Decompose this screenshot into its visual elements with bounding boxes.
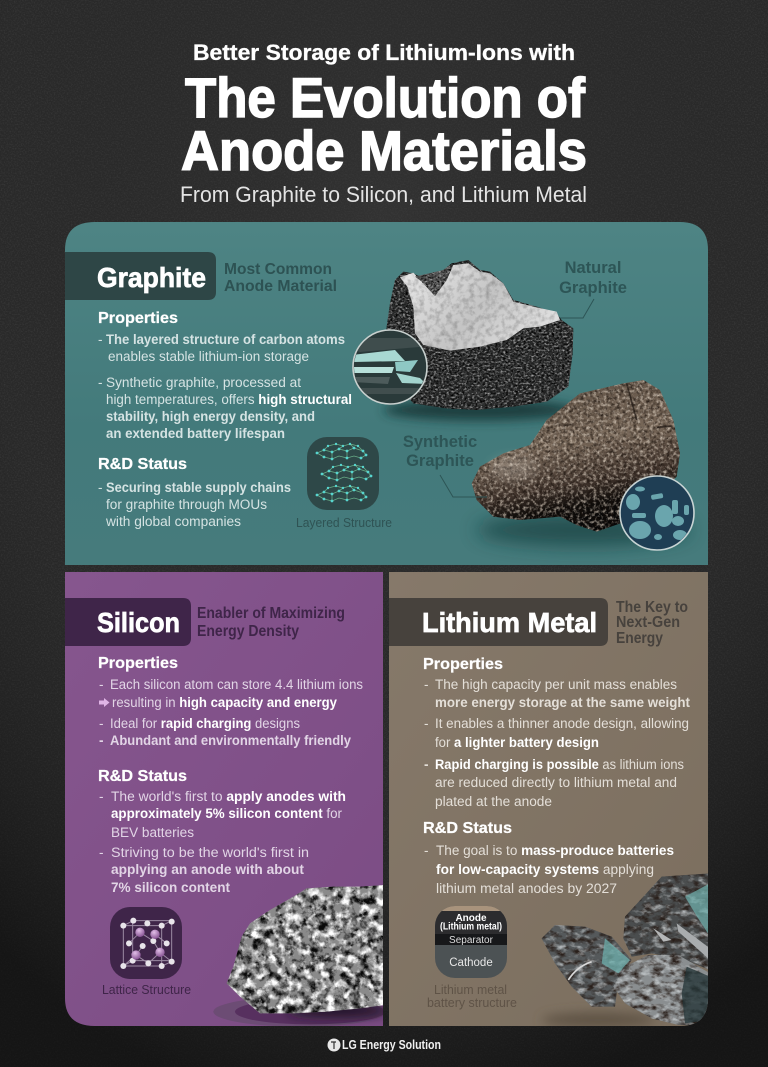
lithium metal properties text: for a lighter battery design (435, 735, 599, 750)
lithium metal properties text: - (424, 716, 428, 731)
lithium metal panel background (389, 572, 708, 1026)
natural graphite rock (383, 260, 577, 421)
lithium metal battery structure caption (427, 982, 517, 1010)
silicon R&D status text: R&D Status (98, 768, 187, 785)
graphite properties text: - (98, 332, 102, 347)
icon: lithium metal battery structure: (Lithium metal) (440, 922, 502, 932)
title block (180, 40, 587, 207)
synthetic graphite label: Synthetic (403, 433, 477, 451)
lithium metal R&D status text (423, 820, 674, 896)
icon: lattice structure (110, 907, 182, 979)
panel: graphite (65, 222, 708, 565)
graphite R&D status text: - (98, 480, 102, 495)
synthetic graphite label: Graphite (406, 452, 474, 470)
lithium metal battery structure caption: Lithium metal (434, 982, 507, 997)
silicon subtitle (197, 605, 345, 640)
silicon R&D status text: - (99, 789, 104, 804)
graphite properties text (98, 310, 352, 441)
icon: lithium metal battery structure: Anode (455, 913, 487, 924)
silicon properties text: Each silicon atom can store 4.4 lithium ions (110, 677, 363, 692)
silicon properties text: - (99, 716, 104, 731)
synthetic graphite label (403, 433, 477, 470)
lattice structure caption: Lattice Structure (102, 982, 191, 997)
lithium metal properties text: Properties (423, 656, 503, 673)
silicon properties text: Ideal for rapid charging designs (110, 716, 300, 731)
icon: lithium metal battery structure: Separator (449, 935, 494, 946)
graphite properties text: Synthetic graphite, processed at (106, 375, 301, 390)
lithium metal R&D status text: lithium metal anodes by 2027 (436, 881, 617, 896)
graphite subtitle: Anode Material (224, 278, 337, 295)
lithium metal properties text: The high capacity per unit mass enables (435, 677, 677, 692)
natural graphite label: Natural (565, 259, 621, 277)
lithium metal R&D status text: - (424, 843, 428, 858)
synthetic graphite leader line (440, 475, 487, 497)
graphite heading label: Graphite (97, 262, 206, 293)
graphite R&D status text: for graphite through MOUs (106, 497, 267, 512)
silicon R&D status text: The world's first to apply anodes with (111, 789, 346, 804)
lithium metal properties text: It enables a thinner anode design, allowing (435, 716, 689, 731)
icon: arrow (99, 698, 110, 707)
lithium metal properties text: - (424, 757, 428, 772)
graphite R&D status text: with global companies (105, 514, 241, 529)
silicon properties text: Abundant and environmentally friendly (110, 733, 351, 748)
lithium metal properties text: more energy storage at the same weight (435, 695, 690, 710)
title block: From Graphite to Silicon, and Lithium Metal (180, 182, 587, 207)
natural graphite label: Graphite (559, 279, 627, 297)
graphite subtitle: Most Common (224, 261, 332, 278)
graphite R&D status text (98, 456, 291, 529)
synthetic graphite magnifier circle (620, 476, 694, 550)
silicon R&D status text: - (99, 845, 104, 860)
lithium metal R&D status text: for low-capacity systems applying (436, 862, 654, 877)
lithium metal battery structure caption: battery structure (427, 995, 517, 1010)
silicon heading label: Silicon (97, 607, 180, 638)
lithium metal subtitle (616, 599, 688, 647)
silicon panel background (65, 572, 383, 1026)
silicon R&D status text: Striving to be the world's first in (111, 845, 309, 860)
silicon R&D status text: applying an anode with about (111, 862, 304, 877)
silicon subtitle: Energy Density (197, 623, 299, 640)
lithium metal properties text: Rapid charging is possible as lithium ions (435, 757, 684, 772)
graphite R&D status text: R&D Status (98, 456, 187, 473)
lithium metal properties text: are reduced directly to lithium metal and (435, 775, 677, 790)
graphite properties text: - (98, 375, 102, 390)
silicon properties text: Properties (98, 655, 178, 672)
lithium metal subtitle: The Key to (616, 599, 688, 616)
silicon heading label (65, 598, 191, 646)
lithium metal properties text (423, 656, 690, 809)
silicon metal rock (213, 885, 387, 1027)
graphite properties text: The layered structure of carbon atoms (106, 332, 345, 347)
silicon properties text: - (99, 733, 104, 748)
silicon properties text (98, 655, 363, 748)
graphite properties text: enables stable lithium-ion storage (108, 349, 309, 364)
graphite properties text: Properties (98, 310, 178, 327)
graphite properties text: stability, high energy density, and (106, 409, 315, 424)
lithium metal properties text: plated at the anode (435, 794, 552, 809)
graphite panel background (65, 222, 708, 565)
graphite subtitle (224, 261, 337, 295)
lithium metal rocks (542, 873, 710, 1027)
lithium metal properties text: - (424, 677, 428, 692)
icon: lithium metal battery structure: Cathode (449, 957, 493, 969)
silicon R&D status text: approximately 5% silicon content for (111, 806, 342, 821)
synthetic graphite rock (472, 380, 690, 546)
title block: Anode Materials (181, 119, 587, 182)
layered structure caption: Layered Structure (296, 515, 392, 530)
logo: LG Energy Solution: LG Energy Solution (342, 1038, 441, 1052)
silicon R&D status text (98, 768, 346, 895)
title block: Better Storage of Lithium-Ions with (193, 40, 575, 65)
natural graphite leader line (560, 299, 594, 318)
panel: silicon (65, 572, 387, 1027)
lithium metal heading label (389, 598, 608, 646)
lithium metal R&D status text: R&D Status (423, 820, 512, 837)
silicon R&D status text: 7% silicon content (111, 880, 230, 895)
graphite heading label (65, 252, 216, 300)
silicon subtitle: Enabler of Maximizing (197, 605, 345, 622)
silicon properties text: resulting in high capacity and energy (112, 695, 337, 710)
icon: layered structure (307, 437, 379, 510)
lithium metal subtitle: Energy (616, 630, 663, 647)
title block: The Evolution of (185, 66, 585, 129)
natural graphite magnifier circle (350, 330, 430, 404)
lithium metal R&D status text: The goal is to mass-produce batteries (436, 843, 674, 858)
lithium metal heading label: Lithium Metal (422, 607, 597, 638)
lithium metal subtitle: Next-Gen (616, 614, 680, 631)
graphite properties text: high temperatures, offers high structural (106, 392, 352, 407)
silicon properties text: - (99, 677, 104, 692)
silicon R&D status text: BEV batteries (111, 825, 194, 840)
natural graphite label (559, 259, 627, 297)
graphite properties text: an extended battery lifespan (106, 426, 285, 441)
graphite R&D status text: Securing stable supply chains (106, 480, 291, 495)
panel: lithium metal (389, 572, 710, 1027)
icon: lithium metal battery structure (435, 906, 507, 978)
